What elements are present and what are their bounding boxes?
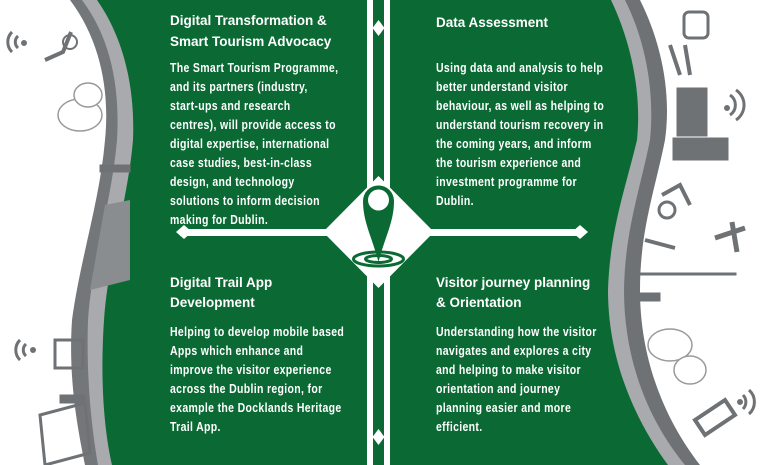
central diamond with pin (323, 176, 434, 288)
panel: digital transformation: solutions to inform decision (170, 195, 320, 208)
panel: digital transformation: design, and technology (170, 176, 295, 189)
panel: visitor journey planning (436, 275, 597, 434)
panel: digital trail app: Trail App. (170, 421, 221, 434)
panel: data assessment: Using data and analysis to help (436, 62, 603, 75)
panel: digital transformation: centres), will provide access to (170, 119, 336, 132)
panel: data assessment: better understand visitor (436, 81, 568, 94)
panel: digital transformation: digital expertise, international (170, 138, 329, 151)
panel: digital trail app: Development (170, 295, 255, 310)
panel: digital trail app: Digital Trail App (170, 275, 272, 290)
panel: digital trail app: example the Docklands Heritage (170, 402, 342, 415)
panel: data assessment: investment programme for (436, 176, 577, 189)
illustrations right (628, 12, 754, 435)
panel: digital transformation: case studies, best-in-class (170, 157, 312, 170)
panel: digital trail app: improve the visitor experience (170, 364, 332, 377)
panel: digital trail app: Apps which enhance and (170, 345, 303, 358)
panel: data assessment: the tourism experience and (436, 157, 581, 170)
panel: visitor journey planning: orientation and journey (436, 383, 560, 396)
panel: digital transformation: The Smart Tourism Programme, (170, 62, 338, 75)
panel: data assessment: Data Assessment (436, 15, 549, 30)
panel: data assessment: the coming years, and inform (436, 138, 592, 151)
panel: digital transformation: and its partners (industry, (170, 81, 308, 94)
illustrations left (8, 32, 130, 465)
panel: digital transformation: making for Dublin. (170, 214, 268, 227)
background road right (600, 0, 700, 465)
green panel (97, 0, 668, 465)
panel: visitor journey planning: & Orientation (436, 295, 522, 310)
background road left (70, 0, 140, 465)
panel: digital trail app: Helping to develop mobile based (170, 326, 344, 339)
panel: data assessment: understand tourism recovery in (436, 119, 603, 132)
panel: visitor journey planning: navigates and explores a city (436, 345, 592, 358)
panel: visitor journey planning: efficient. (436, 421, 482, 434)
panel: digital transformation (170, 13, 338, 227)
panel: data assessment: Dublin. (436, 195, 474, 208)
panel: digital trail app (170, 275, 344, 434)
horizontal road (176, 225, 588, 239)
panel: digital transformation: Digital Transformation & (170, 13, 327, 28)
panel: data assessment: behaviour, as well as helping to (436, 100, 604, 113)
panel: visitor journey planning: Visitor journey planning (436, 275, 590, 290)
panel: digital transformation: start-ups and research (170, 100, 290, 113)
panel: visitor journey planning: and helping to make visitor (436, 364, 581, 377)
panel: data assessment (436, 15, 604, 208)
panel: visitor journey planning: Understanding how the visitor (436, 326, 597, 339)
panel: visitor journey planning: planning easier and more (436, 402, 571, 415)
panel: digital trail app: across the Dublin region, for (170, 383, 323, 396)
vertical road (367, 0, 390, 465)
panel: digital transformation: Smart Tourism Advocacy (170, 34, 332, 49)
